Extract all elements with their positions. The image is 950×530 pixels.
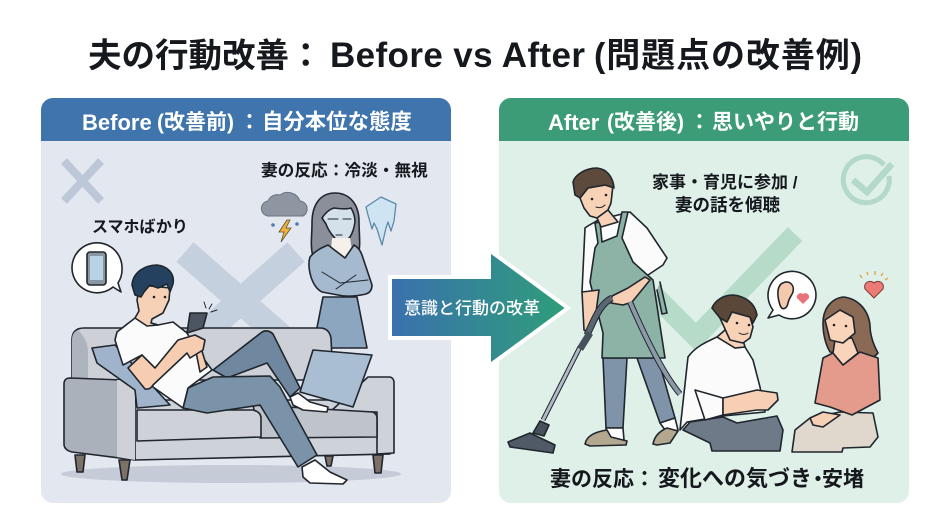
phone [187, 313, 207, 333]
title [88, 36, 862, 75]
seated woman [792, 297, 880, 452]
hands [810, 412, 840, 427]
panel: after [499, 98, 909, 503]
trousers [683, 416, 783, 451]
before heading: ： [239, 111, 260, 134]
before heading: Before [82, 110, 152, 135]
label: wife reaction after: ・ [808, 469, 828, 491]
icon: storm cloud [261, 192, 307, 242]
icon: heart [860, 271, 888, 298]
after heading [548, 110, 859, 135]
after heading: ： [689, 111, 710, 134]
sofa [61, 328, 401, 483]
sweater [815, 352, 880, 415]
pillow [300, 350, 372, 407]
before heading: 自分本位な態度 [262, 110, 412, 134]
sock lower [302, 460, 347, 484]
before heading [82, 110, 412, 135]
legs [603, 358, 627, 428]
title: Before vs After [330, 36, 585, 75]
shirt [115, 318, 212, 408]
jeans back leg [213, 331, 300, 397]
label: housework and listening: 家事・育児に参加 / [652, 172, 798, 192]
seated man [680, 295, 783, 451]
head [135, 285, 170, 326]
arrow label: 意識と行動の改革 [404, 299, 540, 318]
label: wife reaction after: 妻の反応： [550, 468, 655, 491]
label: wife reaction: 妻の反応：冷淡・無視 [261, 161, 428, 180]
shirt [582, 212, 667, 300]
face [825, 310, 855, 343]
after heading: After [548, 110, 600, 135]
neck and face [717, 330, 745, 348]
label: wife reaction after: 変化への気づき [658, 466, 812, 491]
label: phone only: スマホばかり [92, 218, 188, 236]
icon: check in ring [843, 157, 892, 203]
label: wife reaction after: 安堵 [822, 468, 864, 491]
title: 夫の行動改善： [88, 38, 322, 75]
arms [582, 290, 599, 333]
motion marks [204, 302, 217, 312]
arm [128, 335, 205, 389]
head [580, 185, 613, 218]
label: housework and listening [652, 172, 798, 215]
arrow [390, 250, 568, 366]
after heading: 思いやりと行動 [712, 111, 859, 134]
apron [590, 212, 665, 358]
before heading: (改善前) [157, 111, 234, 134]
sock upper [290, 393, 328, 412]
panel: before [41, 98, 451, 503]
shirt [680, 337, 765, 430]
label: housework and listening: 妻の話を傾聴 [675, 195, 780, 215]
icon: ice [366, 197, 396, 245]
man on sofa [115, 265, 372, 484]
sleeve [695, 390, 723, 420]
left forearm [195, 345, 207, 372]
jeans front leg [183, 376, 317, 467]
forearm and hands [723, 390, 778, 415]
wife figure [309, 193, 372, 348]
man vacuuming [508, 168, 680, 453]
icon: ear bubble [768, 271, 816, 319]
icon: small cross [64, 161, 101, 201]
title: (問題点の改善例) [594, 37, 862, 75]
icon: large check [655, 234, 795, 337]
socks and slippers [606, 418, 678, 440]
neck [833, 338, 858, 365]
label: wife reaction after [550, 466, 864, 491]
skirt [792, 412, 878, 452]
vacuum [508, 298, 680, 453]
icon: phone speech bubble [72, 243, 122, 293]
after heading: (改善後) [607, 111, 684, 134]
hair [823, 297, 878, 358]
icon: large cross [172, 252, 310, 362]
